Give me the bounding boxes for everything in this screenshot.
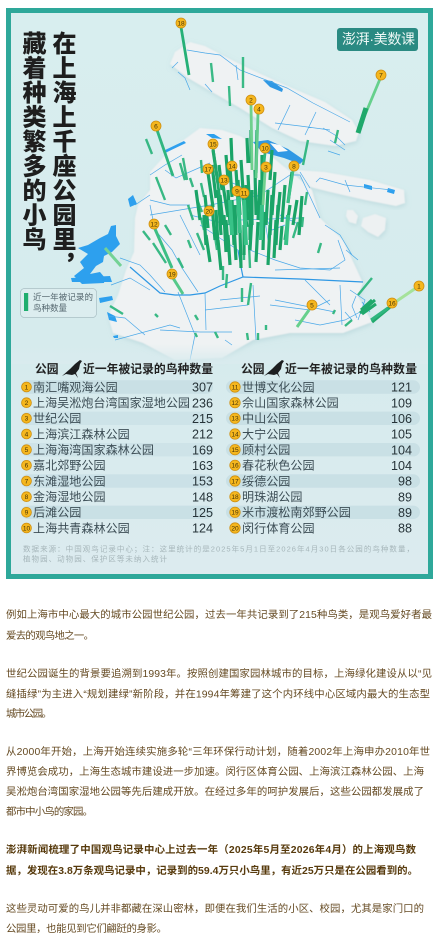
rows: 105 [391,428,412,442]
bar: park 6 [157,130,173,176]
rows: 世纪公园 [33,412,81,426]
bars: dark green park species columns, west and outer districts [110,57,372,340]
rows: 9 [25,510,29,517]
bar: park 15 [213,148,220,200]
rows: 米市渡松南郊野公园 [242,505,351,520]
table header left: 近一年被记录的鸟种数量 [83,362,213,376]
map of Shanghai [11,27,428,364]
rows: 世博文化公园 [242,379,315,394]
map number markers: 12 [150,221,158,228]
rows: 13 [231,416,239,423]
rows: 10 [23,525,30,532]
rows: 南汇嘴观海公园 [33,379,118,394]
map number markers: 14 [228,163,236,170]
title: second line: 在上海上千座公园里， [47,31,82,276]
article paragraph 1: 爱去的观鸟地之一。 [6,629,94,642]
map number markers: 9 [235,188,239,195]
map number markers: 4 [257,106,261,113]
rows: 104 [391,443,412,457]
map number markers: 10 [261,145,269,152]
map number markers: 13 [220,177,228,184]
map number markers: 18 [177,20,185,27]
rows: 18 [231,494,239,501]
rows: 明珠湖公园 [242,489,302,504]
rows: 绥德公园 [242,473,290,488]
river network [108,50,392,360]
water: western creeks [71,134,222,338]
rows: 顾村公园 [242,443,290,457]
map number markers: 3 [264,164,268,171]
water: Changxing strip [364,184,395,194]
rows: 153 [192,475,213,489]
bar: park 8 [288,171,293,203]
rows: 上海共青森林公园 [33,520,130,535]
map number markers: 20 [205,208,213,215]
rows: 121 [391,381,412,395]
bar: park 1 base [371,308,388,320]
rows: 88 [398,522,412,536]
bar: park 5 [297,310,309,327]
rows: 98 [398,475,412,489]
title: first line: 藏着种类繁多的小鸟 [17,31,52,252]
rows: 148 [192,490,213,504]
rows: 后滩公园 [33,506,81,520]
logo: The Paper data lab: 澎湃·美数课 [342,31,415,47]
rows: 215 [192,412,213,426]
map number markers: 6 [154,123,158,130]
article paragraph 2: 世纪公园诞生的背景要追溯到1993年。按照创建国家园林城市的目标，上海绿化建设从以“见 [6,667,432,680]
article paragraph 2: 缝插绿”为主进入“规划建绿”新阶段，并在1994年筹建了这个内环线中心区域内最大的生态型 [6,688,430,700]
rows: 124 [192,522,213,536]
map number markers: 2 [249,97,253,104]
land: Shanghai mainland [108,128,372,360]
rows: 212 [192,428,213,442]
bar: Dianshan column [105,248,121,266]
rows: 14 [231,431,239,438]
bar: park 16 [372,307,390,322]
rows: 中山公园 [242,411,290,426]
table header left: 公园 [35,362,59,376]
article paragraph 2: 城市公园。 [6,707,52,720]
map number markers: 15 [209,141,217,148]
rows: 佘山国家森林公园 [242,395,339,410]
rows: 89 [398,506,412,520]
icon: bird right [264,360,284,378]
rows: 15 [231,447,239,454]
land: small shoals [346,210,386,237]
legend: 近一年被记录的 [33,292,93,302]
lake: Dianshan lake and Qingpu water [74,225,120,284]
article paragraph 3: 都市中小鸟的家园。 [6,805,93,818]
article paragraph 3: 从2000年开始，上海开始连续实施多轮“三年环保行动计划，随着2002年上海申办2010年世 [6,745,430,758]
article paragraph 4, bold: 澎湃新闻梳理了中国观鸟记录中心上过去一年（2025年5月至2026年4月）的上海观鸟数 [6,843,417,856]
rows: 金海湿地公园 [33,489,106,504]
map number markers: 1 [417,283,421,290]
water: white island inside the lake [270,143,288,152]
bar: Pudong south cluster [360,300,376,314]
legend: 鸟种数量 [33,303,68,313]
water: Jinhai area lake [253,140,304,164]
map number markers: 17 [204,166,212,173]
bar: park 12 [155,229,172,268]
article paragraph 4, bold [6,843,418,877]
rows: 106 [391,412,412,426]
icon: bird left [62,360,82,378]
bar: park 4 [256,113,258,178]
rows: 春花秋色公园 [242,458,315,473]
rows: 20 [231,525,239,532]
bar: park 10 [263,153,265,172]
map number markers: 8 [292,163,296,170]
rows: 1 [25,384,29,391]
article paragraph 5: 公园里，也能见到它们翩跹的身影。 [6,922,167,935]
article paragraph 5: 这些灵动可爱的鸟儿并非都藏在深山密林，即便在我们生活的小区、校园，尤其是家门口的 [6,902,424,915]
bar: park 3 [263,172,265,205]
infographic panel frame [8,10,430,576]
rows: 11 [232,384,239,391]
rows: 104 [391,459,412,473]
rows: 163 [192,459,213,473]
rows: 16 [231,463,239,470]
rows: 236 [192,396,213,410]
water: Chongming lake [263,80,283,92]
rows: 6 [25,463,29,470]
rows: 8 [25,494,29,501]
rows: 109 [391,396,412,410]
rows: 19 [231,510,239,517]
rows: 125 [192,506,213,520]
bars: leader columns of the top parks [105,27,416,327]
bar: park 19 [173,278,183,294]
fade of map into table [11,344,428,364]
land: Changxing and Hengsha islands [296,170,405,206]
bar: park 2 [251,104,252,170]
rows: 大宁公园 [242,426,290,441]
rows: 闵行体育公园 [242,520,315,535]
data source note [23,544,414,564]
bars: dense city-centre cluster [196,130,302,270]
article paragraph 3: 界博览会成功，上海生态城市建设进一步加速。闵行区体育公园、上海滨江森林公园、上海 [6,765,424,778]
map number markers: 16 [388,300,396,307]
rows: 嘉北郊野公园 [33,459,106,473]
article paragraph 2 [6,667,432,720]
logo: The Paper data lab [337,28,418,51]
map number markers: 5 [310,302,314,309]
map number markers: 19 [168,271,176,278]
article paragraph 1: 例如上海市中心最大的城市公园世纪公园，过去一年共记录到了215种鸟类，是观鸟爱好者最 [6,608,433,621]
rows: 307 [192,381,213,395]
article paragraph 1 [6,608,433,642]
rows: 上海吴淞炮台湾国家湿地公园 [33,395,190,410]
bar: park 7 [362,79,380,122]
bar: park 18 [181,27,189,75]
rows: 上海海湾国家森林公园 [33,442,154,457]
article paragraph 3: 吴淞炮台湾国家湿地公园等先后建成开放。在经过多年的呵护发展后，这些公园都发展成了 [6,785,424,798]
table header right: 公园 [241,362,265,376]
rows: 4 [25,431,29,438]
bars: tallest light-green column at city centre [230,197,288,245]
rows: 5 [25,447,29,454]
legend [20,288,96,318]
rows [21,379,213,536]
article paragraph 3 [6,745,430,818]
rows: 上海滨江森林公园 [33,426,130,441]
data source note: 数据来源：中国观鸟记录中心；注：这里统计的是2025年5月1日至2026年4月30日各公园的鸟种数量， [23,544,414,554]
map number markers [149,18,424,310]
table: right column, parks 11-20 [226,360,420,536]
rows: 东滩湿地公园 [33,473,106,488]
table header right: 近一年被记录的鸟种数量 [285,362,417,376]
bar: park 1 [388,288,416,307]
rows: 2 [25,400,29,407]
map number markers: 11 [241,190,248,197]
rows: 169 [192,443,213,457]
rows [226,379,420,536]
map number markers: 7 [379,72,383,79]
rows: 17 [231,478,239,485]
article paragraph 5 [6,902,424,935]
rows: 89 [398,490,412,504]
land: Chongming island [170,42,359,146]
article paragraph 4, bold: 据，发现在3.8万条观鸟记录中，记录到的59.4万只小鸟里，有近25万只是在公园看到的。 [6,864,418,877]
table: left column, parks 1-10 [21,360,213,536]
data source note: 植物园、动物园、保护区等未纳入统计 [23,554,168,564]
rows: 3 [25,416,29,423]
bar: park 7 base [358,108,366,133]
rows: 12 [231,400,239,407]
rows: 7 [25,478,29,485]
